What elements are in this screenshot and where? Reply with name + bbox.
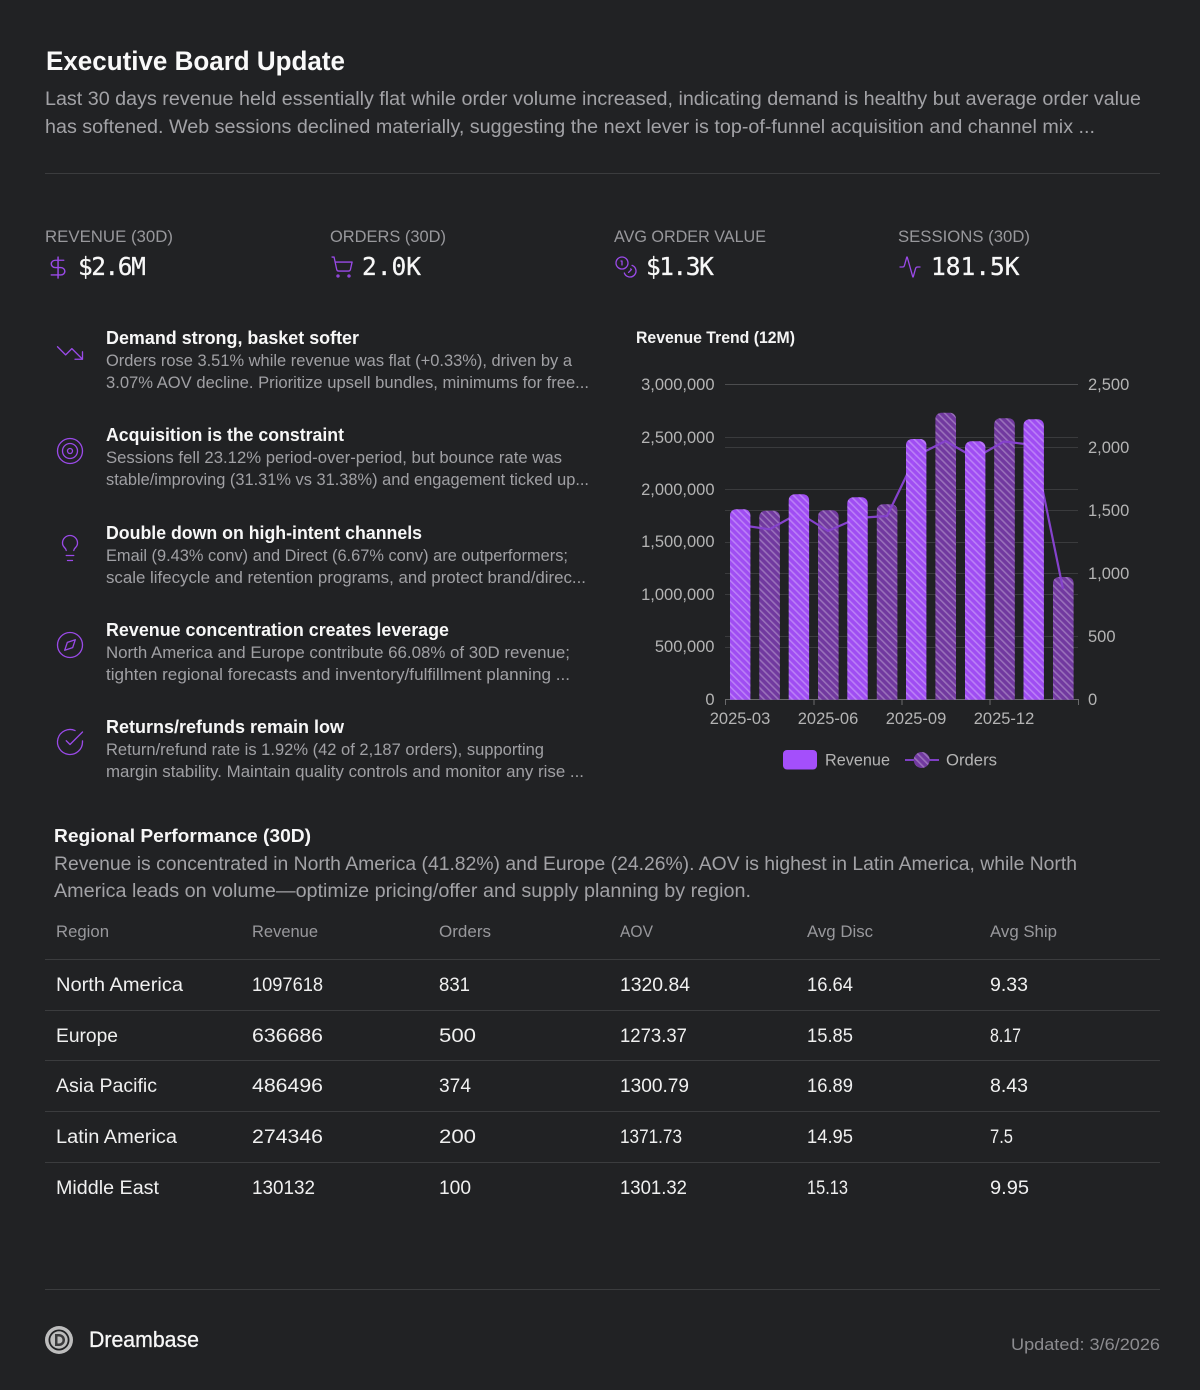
left axis labels: 1,500,000: [641, 533, 714, 551]
row: North America: North America: [56, 975, 183, 996]
legend: Revenue: [825, 752, 890, 770]
row: Europe: 500: [439, 1026, 476, 1047]
insight: acquisition: [58, 425, 589, 489]
chart: revenue trend: [636, 329, 1129, 770]
left axis labels: 1,000,000: [641, 586, 714, 604]
insight: revenue concentration: tighten regional forecasts and inventory/fulfillment planning ...: [106, 665, 570, 684]
KPI: orders: 2.0K: [362, 252, 421, 281]
row: Europe: 636686: [252, 1026, 323, 1047]
regional description: America leads on volume—optimize pricing/offer and supply planning by region.: [54, 881, 751, 902]
icon: Dreambase logo: [45, 1326, 73, 1354]
table header: Revenue: [252, 922, 318, 941]
row: Europe: Europe: [56, 1026, 118, 1047]
insights list: [58, 328, 589, 781]
left axis labels: 2,000,000: [641, 481, 714, 499]
row: Middle East: [56, 1178, 1029, 1199]
insight: returns: [58, 717, 584, 781]
orders bars: [759, 413, 1074, 711]
row: Latin America: 7.5: [990, 1127, 1013, 1148]
KPI: orders: ORDERS (30D): [330, 228, 446, 246]
row: Latin America: 14.95: [807, 1127, 853, 1148]
insight: demand strong: Demand strong, basket softer: [106, 328, 359, 348]
KPI: revenue: REVENUE (30D): [45, 228, 173, 246]
summary paragraph: has softened. Web sessions declined materially, suggesting the next lever is top-of-funnel acquisition and channel mix ...: [45, 117, 1095, 138]
footer brand: [45, 1326, 199, 1354]
row: Latin America: 1371.73: [620, 1127, 682, 1148]
row: Middle East: 130132: [252, 1178, 315, 1199]
insight: high-intent channels: Email (9.43% conv) and Direct (6.67% conv) are outperformers;: [106, 546, 568, 565]
left axis labels: 0: [705, 691, 714, 709]
right axis labels: 1,000: [1088, 565, 1129, 583]
row: North America: 16.64: [807, 975, 853, 996]
row: Asia Pacific: 16.89: [807, 1076, 853, 1097]
table header: Avg Disc: [807, 922, 873, 941]
x axis labels: 2025-09: [886, 710, 946, 728]
insight: acquisition: Sessions fell 23.12% period-over-period, but bounce rate was: [106, 448, 562, 467]
row: Europe: 8.17: [990, 1026, 1021, 1047]
orders line: [740, 441, 1063, 589]
insight: revenue concentration: [58, 620, 570, 684]
row: Asia Pacific: 1300.79: [620, 1076, 689, 1097]
insight: returns: Return/refund rate is 1.92% (42 of 2,187 orders), supporting: [106, 740, 544, 759]
row: Asia Pacific: [56, 1076, 1028, 1097]
row: Middle East: Middle East: [56, 1178, 160, 1199]
table header: Avg Ship: [990, 922, 1057, 941]
insight: returns: margin stability. Maintain quality controls and monitor any rise ...: [106, 762, 584, 781]
regional table: [45, 922, 1160, 1199]
right axis labels: 0: [1088, 691, 1097, 709]
table header: AOV: [620, 922, 654, 941]
insight: acquisition: stable/improving (31.31% vs 31.38%) and engagement ticked up...: [106, 470, 589, 489]
chart title: Revenue Trend (12M): [636, 329, 795, 347]
row: Asia Pacific: 486496: [252, 1076, 323, 1097]
row: Latin America: Latin America: [56, 1127, 177, 1148]
row: North America: [56, 975, 1028, 996]
insight: demand strong: 3.07% AOV decline. Prioritize upsell bundles, minimums for free...: [106, 373, 589, 392]
insight: returns: Returns/refunds remain low: [106, 717, 345, 737]
left axis labels: 2,500,000: [641, 429, 714, 447]
row: Europe: 15.85: [807, 1026, 853, 1047]
row: Latin America: 274346: [252, 1127, 323, 1148]
insight: revenue concentration: Revenue concentration creates leverage: [106, 620, 449, 640]
row: Middle East: 15.13: [807, 1178, 848, 1199]
revenue bars: [730, 419, 1044, 709]
row: Asia Pacific: 374: [439, 1076, 471, 1097]
right axis labels: 1,500: [1088, 502, 1129, 520]
row: Middle East: 9.95: [990, 1178, 1029, 1199]
row: North America: 9.33: [990, 975, 1028, 996]
right axis labels: 2,500: [1088, 376, 1129, 394]
left axis labels: 500,000: [655, 638, 714, 656]
summary paragraph: Last 30 days revenue held essentially flat while order volume increased, indicating demand is healthy but average order value: [45, 89, 1141, 110]
insight: revenue concentration: North America and Europe contribute 66.08% of 30D revenue;: [106, 643, 570, 662]
right axis labels: 2,000: [1088, 439, 1129, 457]
table header: [56, 922, 1057, 941]
table header: Region: [56, 922, 109, 941]
insight: high-intent channels: [62, 523, 586, 587]
KPI: revenue: [45, 228, 173, 281]
left axis labels: [641, 376, 714, 709]
right axis labels: 500: [1088, 628, 1116, 646]
insight: demand strong: [58, 328, 589, 392]
insight: demand strong: Orders rose 3.51% while revenue was flat (+0.33%), driven by a: [106, 351, 573, 370]
legend: Orders: [946, 752, 997, 770]
KPI row: [45, 228, 1030, 281]
KPI: sessions: 181.5K: [931, 252, 1020, 281]
row: Latin America: 200: [439, 1127, 476, 1148]
footer brand: Dreambase: [89, 1327, 199, 1352]
row: North America: 1097618: [252, 975, 323, 996]
row: Europe: [56, 1026, 1021, 1047]
KPI: average order value: $1.3K: [646, 252, 714, 281]
insight: high-intent channels: Double down on high-intent channels: [106, 523, 422, 543]
x axis labels: 2025-12: [974, 710, 1034, 728]
regional description: [54, 854, 1077, 902]
KPI: orders: [330, 228, 446, 281]
row: Middle East: 100: [439, 1178, 471, 1199]
regional heading: Regional Performance (30D): [54, 826, 311, 846]
KPI: average order value: AVG ORDER VALUE: [614, 228, 766, 246]
summary paragraph: [45, 89, 1141, 138]
legend: [783, 750, 997, 770]
KPI: average order value: [614, 228, 766, 281]
row: Asia Pacific: Asia Pacific: [56, 1076, 157, 1097]
KPI: sessions: SESSIONS (30D): [898, 228, 1030, 246]
regional description: Revenue is concentrated in North America (41.82%) and Europe (24.26%). AOV is highest in Latin America, while North: [54, 854, 1077, 875]
right axis labels: [1088, 376, 1129, 709]
row: North America: 1320.84: [620, 975, 690, 996]
x axis labels: 2025-06: [798, 710, 858, 728]
KPI: sessions: [898, 228, 1030, 281]
row: Latin America: [56, 1127, 1013, 1148]
updated date: Updated: 3/6/2026: [1011, 1335, 1160, 1354]
x axis labels: [710, 710, 1034, 728]
row: Europe: 1273.37: [620, 1026, 687, 1047]
row: Middle East: 1301.32: [620, 1178, 687, 1199]
table header: Orders: [439, 922, 491, 941]
left axis labels: 3,000,000: [641, 376, 714, 394]
x axis labels: 2025-03: [710, 710, 770, 728]
insight: high-intent channels: scale lifecycle and retention programs, and protect brand/direc...: [106, 568, 586, 587]
row: Asia Pacific: 8.43: [990, 1076, 1028, 1097]
title: Executive Board Update: [46, 46, 345, 76]
row: North America: 831: [439, 975, 470, 996]
KPI: revenue: $2.6M: [78, 252, 146, 281]
insight: acquisition: Acquisition is the constraint: [106, 425, 344, 445]
